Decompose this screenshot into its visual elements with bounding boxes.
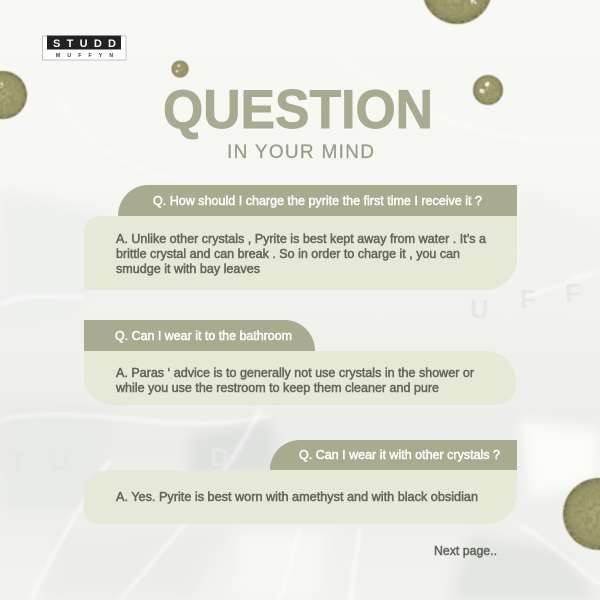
answer text 3: A. Yes. Pyrite is best worn with amethyst and with black obsidian	[116, 490, 478, 504]
logo: Studd Muffyn: STUDD	[53, 38, 116, 50]
logo: Studd Muffyn: MUFFYN	[56, 53, 113, 59]
answer text 1: smudge it with bay leaves	[116, 262, 260, 276]
watermark letters: F	[565, 278, 581, 308]
answer text 1: brittle crystal and can break . So in order to charge it , you can	[116, 247, 460, 261]
question text 1: Q. How should I charge the pyrite the first time I receive it ?	[153, 194, 482, 208]
question bar 1	[118, 185, 517, 216]
question bar 2	[84, 320, 315, 351]
pyrite sphere: left	[0, 71, 27, 119]
answer text 2: A. Paras ‘ advice is to generally not use crystals in the shower or	[116, 366, 474, 380]
watermark letters: F	[520, 284, 536, 314]
next page note: Next page..	[434, 544, 497, 558]
watermark letters	[10, 278, 581, 476]
pyrite sphere: bottom right	[563, 478, 600, 550]
watermark letters: U	[50, 446, 69, 476]
answer card 2	[84, 351, 516, 405]
watermark letters: T	[10, 446, 26, 476]
answer text 2	[115, 366, 474, 395]
answer text 1	[116, 232, 486, 276]
pyrite sphere: small right	[473, 75, 503, 105]
answer text 2: while you use the restroom to keep them cleaner and pure	[115, 381, 439, 395]
subtitle: IN YOUR MIND	[227, 142, 374, 163]
panel: question 3	[84, 440, 517, 524]
question bar 3	[270, 440, 517, 470]
answer text 1: A. Unlike other crystals , Pyrite is best kept away from water . It’s a	[116, 232, 486, 246]
watermark letters: U	[470, 294, 489, 324]
panel: question 2	[84, 320, 516, 405]
logo: Studd Muffyn	[42, 36, 126, 60]
question text 3: Q. Can I wear it with other crystals ?	[299, 448, 500, 462]
panel: question 1	[84, 185, 517, 290]
question text 2: Q. Can I wear it to the bathroom	[115, 329, 292, 343]
watermark letters: D	[210, 442, 229, 472]
answer card 1	[84, 216, 517, 290]
pyrite sphere: small centre	[172, 60, 188, 78]
answer card 3	[84, 470, 517, 524]
title: QUESTION	[163, 79, 433, 140]
pyrite sphere: top	[422, 0, 492, 24]
